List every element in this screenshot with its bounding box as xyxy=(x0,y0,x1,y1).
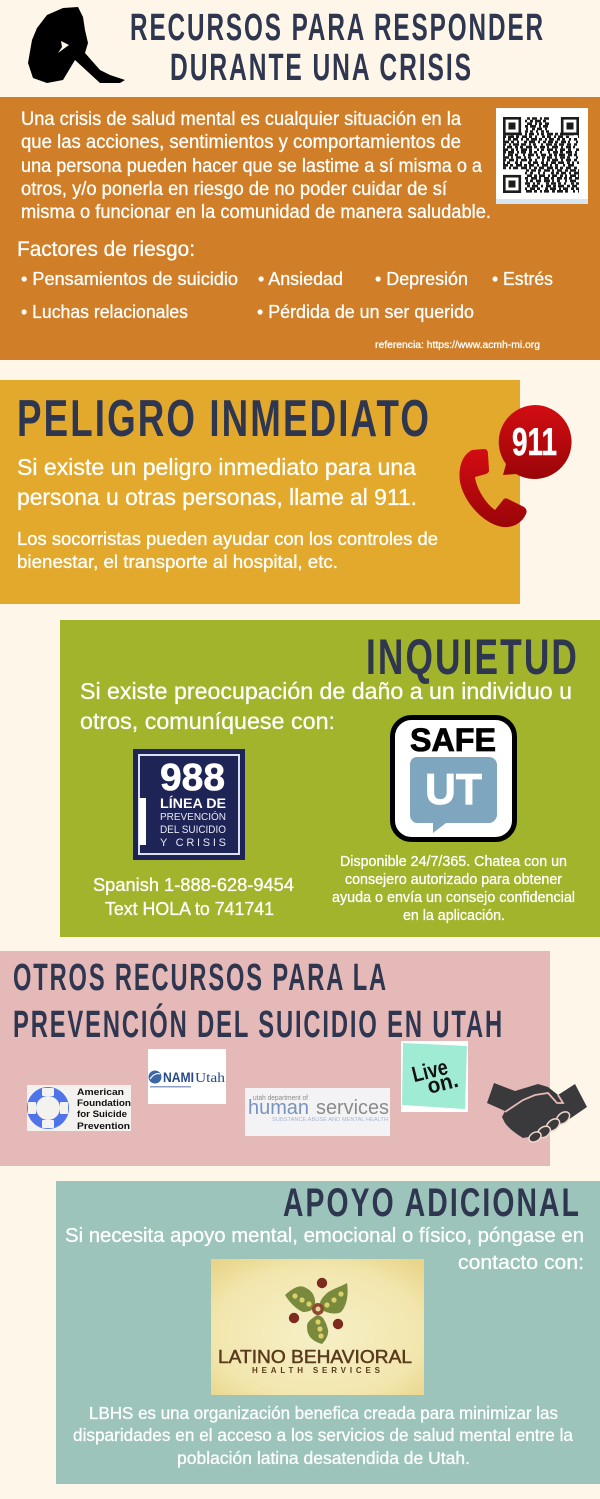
logo: Safe UT: UT xyxy=(425,765,482,814)
logo: American Foundation for Suicide Prevention xyxy=(27,1085,131,1132)
title xyxy=(130,7,545,89)
logo: Safe UT xyxy=(392,718,514,840)
risk factors heading: Factores de riesgo: xyxy=(17,238,195,261)
heading: PELIGRO INMEDIATO xyxy=(17,390,431,448)
definition text: Una crisis de salud mental es cualquier situación en la xyxy=(21,108,461,130)
logo: 988: Y CRISIS xyxy=(160,837,226,849)
definition text xyxy=(21,108,491,223)
risk factor list: • Estrés xyxy=(492,269,553,289)
definition text: una persona pueden hacer que se lastime a sí misma o a xyxy=(21,155,482,177)
hotline numbers: Text HOLA to 741741 xyxy=(105,899,274,919)
Safe UT description: en la aplicación. xyxy=(403,908,505,924)
logo: NAMI Utah xyxy=(148,1049,226,1104)
risk factor list: • Pensamientos de suicidio xyxy=(21,269,238,289)
definition text: que las acciones, sentimientos y comportamientos de xyxy=(21,131,461,153)
logo: Utah Department of Human Services: human xyxy=(248,1097,309,1119)
logo: Live On xyxy=(401,1041,468,1112)
organization description: LBHS es una organización benefica creada para minimizar las xyxy=(89,1403,558,1423)
logo: Latino Behavioral Health Services xyxy=(211,1259,424,1395)
logo: Live On: on. xyxy=(425,1067,461,1099)
logo: Live On: Live xyxy=(409,1054,450,1087)
organization description xyxy=(73,1403,573,1468)
logo: 988: DEL SUICIDIO xyxy=(160,824,226,836)
logo: American Foundation for Suicide Prevention: Foundation xyxy=(77,1098,131,1109)
logo: Latino Behavioral Health Services: HEALTH SERVICES xyxy=(252,1366,381,1375)
hotline numbers xyxy=(93,875,294,919)
responders note: bienestar, el transporte al hospital, etc. xyxy=(17,552,338,572)
panel: other resources xyxy=(0,951,550,1166)
main message: persona u otras personas, llame al 911. xyxy=(17,484,417,510)
panel: immediate danger xyxy=(0,380,520,604)
reference note: referencia: https://www.acmh-mi.org xyxy=(375,339,540,351)
contact message: otros, comuníquese con: xyxy=(80,708,335,734)
logo: 988: PREVENCIÓN xyxy=(160,810,226,823)
Safe UT description: consejero autorizado para obtener xyxy=(345,872,562,888)
risk factor list: • Pérdida de un ser querido xyxy=(257,302,474,322)
responders note xyxy=(17,529,438,572)
panel: definition and risk factors xyxy=(0,97,600,360)
logo: NAMI Utah: NAMI xyxy=(163,1069,194,1085)
heading: OTROS RECURSOS PARA LA xyxy=(13,957,388,999)
panel: concern xyxy=(60,620,600,937)
organization description: disparidades en el acceso a los servicios de salud mental entre la xyxy=(73,1425,573,1445)
Safe UT description: Disponible 24/7/365. Chatea con un xyxy=(340,854,567,870)
organization description: población latina desatendida de Utah. xyxy=(177,1448,470,1468)
logo: American Foundation for Suicide Prevention: for Suicide xyxy=(77,1109,127,1120)
icon: 911 phone xyxy=(460,405,572,527)
contact message xyxy=(80,678,572,734)
hotline numbers: Spanish 1-888-628-9454 xyxy=(93,875,294,895)
icon: sitting person silhouette xyxy=(28,7,125,83)
contact message: contacto con: xyxy=(458,1252,584,1274)
logo: Utah Department of Human Services xyxy=(245,1088,390,1136)
logo: 988 xyxy=(133,749,245,860)
icon: handshake xyxy=(487,1083,587,1144)
Safe UT description xyxy=(332,854,575,924)
contact message xyxy=(65,1225,584,1274)
responders note: Los socorristas pueden ayudar con los controles de xyxy=(17,529,438,549)
logo: Utah Department of Human Services: SUBSTANCE ABUSE AND MENTAL HEALTH xyxy=(272,1117,388,1123)
QR code xyxy=(496,108,588,204)
main message xyxy=(17,454,417,510)
logo: American Foundation for Suicide Prevention: American xyxy=(77,1087,124,1098)
risk factor list: • Luchas relacionales xyxy=(21,302,188,322)
logo: NAMI Utah: Utah xyxy=(195,1071,225,1086)
definition text: otros, y/o ponerla en riesgo de no poder cuidar de sí xyxy=(21,178,448,200)
Safe UT description: ayuda o envía un consejo confidencial xyxy=(332,890,575,906)
icon: 911 phone: 911 xyxy=(512,421,557,464)
logo: American Foundation for Suicide Prevention: Prevention xyxy=(77,1121,130,1132)
heading xyxy=(13,957,504,1046)
logo: Latino Behavioral Health Services: LATINO BEHAVIORAL xyxy=(218,1347,412,1367)
definition text: misma o funcionar en la comunidad de manera saludable. xyxy=(21,201,491,223)
logo: Safe UT: SAFE xyxy=(410,722,496,758)
contact message: Si existe preocupación de daño a un individuo u xyxy=(80,678,572,704)
risk factor list: • Ansiedad xyxy=(258,269,343,289)
risk factor list: • Depresión xyxy=(375,269,468,289)
risk factor list xyxy=(21,269,553,322)
main message: Si existe un peligro inmediato para una xyxy=(17,454,416,480)
contact message: Si necesita apoyo mental, emocional o físico, póngase en xyxy=(65,1225,584,1247)
panel: additional support xyxy=(56,1181,600,1484)
logo: 988: 988 xyxy=(160,757,225,799)
logo: Utah Department of Human Services: services xyxy=(316,1097,389,1119)
logo: 988: LÍNEA DE xyxy=(160,795,226,811)
logo: Utah Department of Human Services: utah department of xyxy=(253,1093,309,1102)
